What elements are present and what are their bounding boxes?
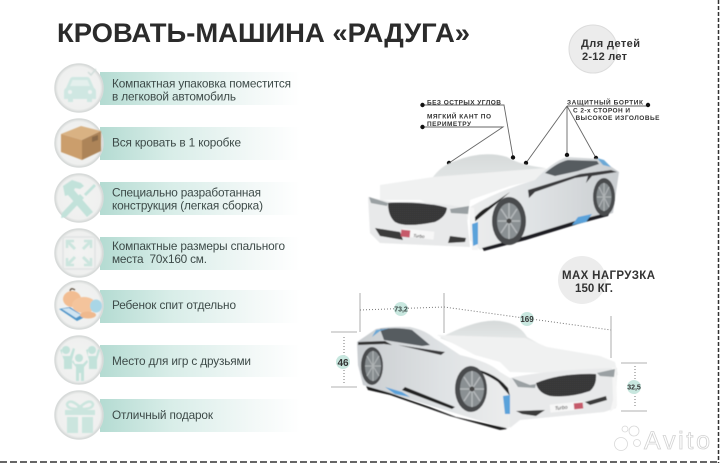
black side stripes <box>358 341 398 350</box>
icon: expand arrows <box>63 237 95 269</box>
car body <box>357 327 512 429</box>
feature: play space <box>55 336 300 384</box>
feature: easy assembly <box>55 174 300 222</box>
licence plate <box>550 401 583 413</box>
callout: protective side: ЗАЩИТНЫЙ БОРТИК <box>567 98 643 106</box>
black side stripes <box>528 170 617 198</box>
icon: cardboard box <box>61 126 101 160</box>
text: Специально разработанная <box>112 186 261 200</box>
icon: hammer and screwdriver <box>61 180 96 218</box>
badge: age: Для детей <box>581 38 640 50</box>
callout: protective side <box>524 98 660 165</box>
feature: one box <box>55 119 300 167</box>
headboard bump <box>440 321 550 350</box>
dimension: height 32.5 <box>627 380 641 394</box>
text: в легковой автомобиль <box>112 90 236 104</box>
windshield <box>545 160 599 176</box>
text: Отличный подарок <box>112 408 214 422</box>
icon: gift box <box>65 402 95 433</box>
text: Место для игр с друзьями <box>112 354 251 368</box>
wheel rear <box>361 347 383 385</box>
feature: great gift <box>55 391 300 439</box>
dimension: height 46 <box>336 355 350 369</box>
lower bumper <box>516 396 607 416</box>
callout: soft piping: МЯГКИЙ КАНТ ПО <box>427 112 491 120</box>
callout: protective side: С 2-х СТОРОН И <box>573 108 630 114</box>
wheel rear <box>593 178 615 216</box>
text: Компактные размеры спального <box>112 239 285 253</box>
wheel front <box>492 197 526 245</box>
dimension: length 169 <box>520 312 534 326</box>
feature: compact packaging <box>55 64 300 112</box>
text: места 70х160 см. <box>112 252 207 266</box>
blue inset <box>503 395 510 414</box>
badge: max load: MAX НАГРУЗКА <box>562 270 655 282</box>
car bed: bottom view from front right <box>357 321 618 430</box>
dimension: width 73.2: 73,2 <box>394 306 408 314</box>
callout: no sharp corners <box>420 100 515 160</box>
front panel <box>368 197 470 247</box>
callout: protective side: ВЫСОКОЕ ИЗГОЛОВЬЕ <box>576 115 660 122</box>
text: Ребенок спит отдельно <box>112 298 236 312</box>
sill <box>482 212 610 251</box>
dimension: width 73.2 <box>394 302 408 316</box>
lower bumper <box>375 228 466 243</box>
car rear body <box>470 157 619 250</box>
sill <box>366 386 507 430</box>
wheel front <box>455 366 487 412</box>
car bed: top view from front left <box>368 154 619 251</box>
car bed: bottom view from front right: Turbo <box>555 405 568 412</box>
watermark: Avito: Avito <box>644 427 710 455</box>
callout: soft piping <box>420 112 503 165</box>
headboard bump <box>430 154 545 200</box>
mattress <box>380 168 560 220</box>
front panel <box>510 368 617 428</box>
dimensions <box>331 293 647 411</box>
blue fog inset <box>472 222 478 246</box>
headlights <box>512 378 536 388</box>
callout: soft piping: ПЕРИМЕТРУ <box>427 121 472 128</box>
badge: max load <box>558 256 655 304</box>
text: конструкция (легкая сборка) <box>112 198 263 212</box>
mattress <box>437 335 618 375</box>
dotted dimension lines <box>344 307 635 408</box>
car bed: top view from front left: Turbo <box>413 233 425 239</box>
badge: age <box>569 25 640 73</box>
badge: age: 2-12 лет <box>582 51 628 63</box>
window <box>380 328 430 346</box>
licence plate <box>402 228 434 240</box>
feature list <box>55 64 300 439</box>
grille <box>388 202 447 225</box>
dimension: length 169: 169 <box>520 315 534 324</box>
dimension: height 32.5: 32,5 <box>627 384 641 392</box>
icon: sleeping baby <box>59 289 102 321</box>
extension lines <box>331 293 647 411</box>
text: Вся кровать в 1 коробке <box>112 136 241 150</box>
title: КРОВАТЬ-МАШИНА «РАДУГА» <box>57 18 470 48</box>
grille <box>536 374 596 396</box>
callouts top car <box>420 98 660 165</box>
badge: max load: 150 КГ. <box>575 283 613 295</box>
callout: no sharp corners: БЕЗ ОСТРЫХ УГЛОВ <box>427 100 501 106</box>
watermark: Avito <box>614 426 710 455</box>
feature: compact size <box>55 229 300 277</box>
feature: child sleeps separately <box>55 281 300 329</box>
icon: three children <box>60 346 100 381</box>
text: Компактная упаковка поместится <box>112 76 291 90</box>
headlights <box>369 197 388 206</box>
dimension: height 46: 46 <box>337 358 349 369</box>
icon: car with check <box>64 69 96 102</box>
